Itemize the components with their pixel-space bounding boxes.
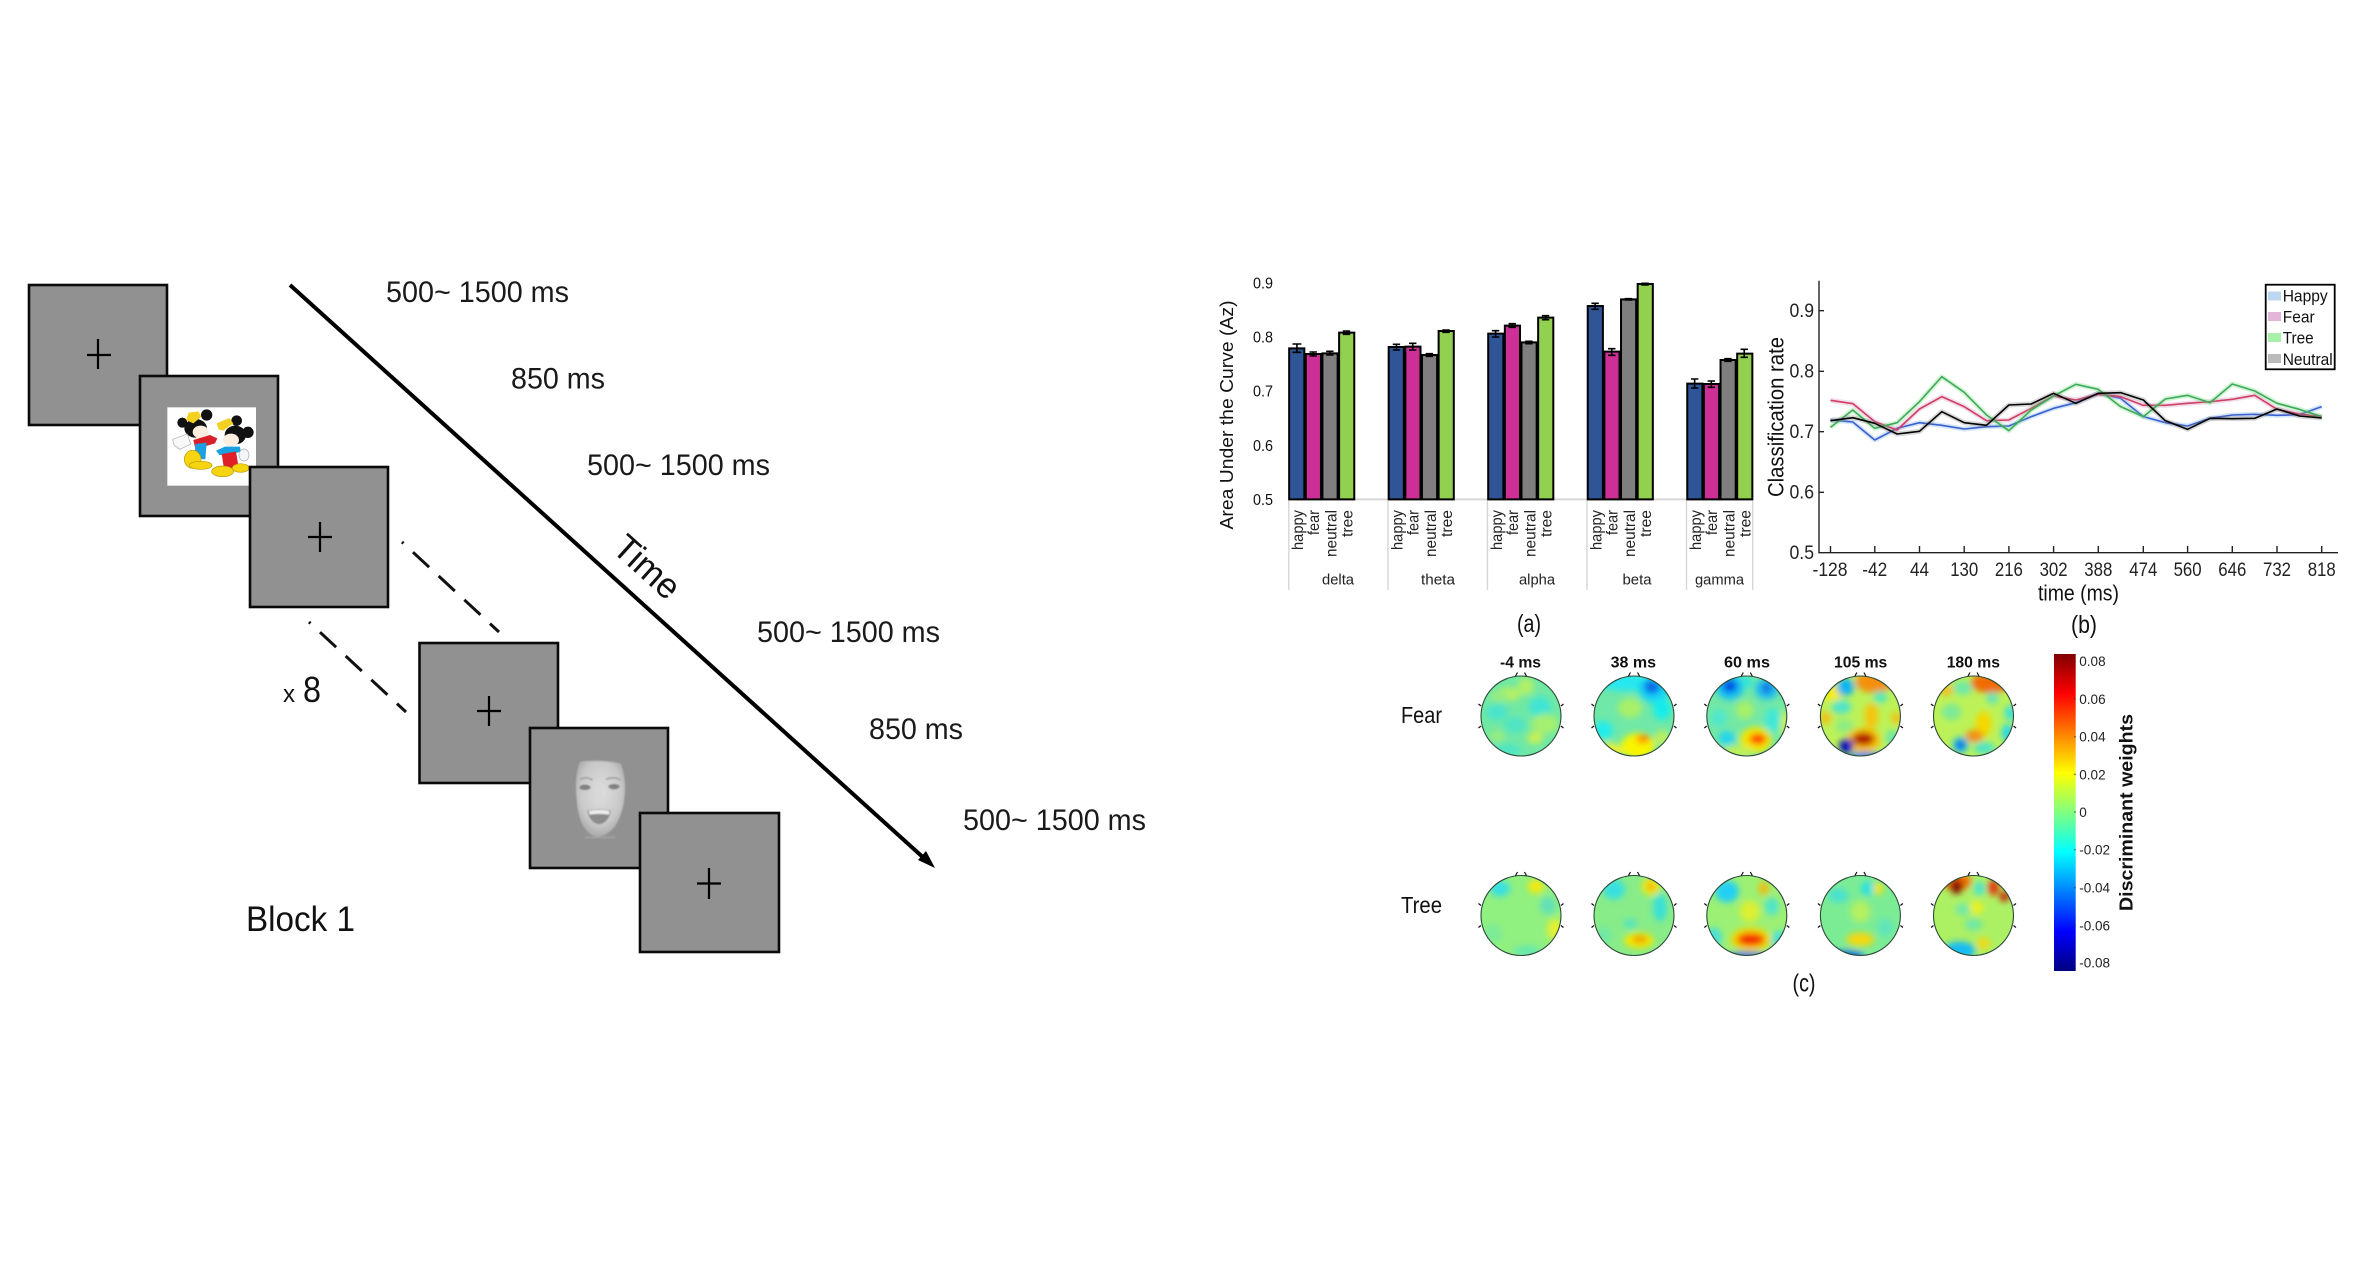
- category labels: tree: [1638, 510, 1655, 537]
- category labels: neutral: [1722, 510, 1739, 557]
- stimulus screen 3: fixation: [250, 467, 388, 607]
- x tick labels: 646: [2218, 560, 2246, 581]
- colorbar tick labels: -0.06: [2079, 918, 2110, 933]
- caption (b): (b): [2071, 611, 2097, 639]
- legend: Fear: [2283, 308, 2315, 327]
- x tick labels: 732: [2263, 560, 2291, 581]
- category labels: happy: [1290, 510, 1307, 550]
- frequency band labels: delta: [1322, 572, 1355, 588]
- x tick labels: -128: [1812, 560, 1848, 581]
- category labels: [1290, 510, 1755, 557]
- panel (c): scalp topographic maps: [1401, 654, 2137, 998]
- category labels: happy: [1489, 510, 1506, 550]
- duration labels: 850 ms: [869, 713, 963, 746]
- topomap: Fear 38 ms: [1592, 672, 1676, 759]
- duration labels: 500~ 1500 ms: [386, 276, 569, 309]
- colorbar tick labels: -0.04: [2079, 881, 2111, 896]
- y tick labels: 0.6: [1790, 482, 1814, 504]
- category labels: tree: [1340, 510, 1357, 537]
- dashed line: lower continuation: [309, 622, 406, 712]
- duration labels: [386, 276, 1146, 837]
- colorbar tick labels: 0.04: [2079, 730, 2106, 745]
- bars: gamma band: [1687, 349, 1752, 499]
- y axis title: Area Under the Curve (Az): [1217, 301, 1237, 529]
- stimulus screen 6: fixation: [640, 813, 779, 952]
- duration labels: 500~ 1500 ms: [757, 616, 940, 649]
- legend: [2266, 285, 2335, 369]
- stimulus screen 2: cartoon image: [140, 376, 278, 516]
- caption (c): (c): [1792, 970, 1816, 998]
- bars: delta band: [1289, 331, 1354, 499]
- dashed line: upper continuation: [402, 542, 499, 632]
- category labels: happy: [1589, 510, 1606, 550]
- x tick labels: [1812, 560, 2336, 581]
- line: Happy: [1830, 393, 2322, 440]
- x tick labels: -42: [1862, 560, 1887, 581]
- topomap: Tree 60 ms: [1704, 872, 1789, 964]
- bars: theta band: [1389, 330, 1454, 499]
- category labels: neutral: [1622, 510, 1639, 557]
- topomap: Tree 105 ms: [1818, 872, 1903, 962]
- time labels: 60 ms: [1724, 655, 1770, 672]
- topomap: Fear -4 ms: [1478, 672, 1564, 758]
- colorbar tick labels: 0.02: [2079, 767, 2106, 782]
- x tick labels: 130: [1950, 560, 1978, 581]
- category labels: tree: [1738, 510, 1755, 537]
- frequency band labels: [1322, 572, 1745, 588]
- topomap: Tree 38 ms: [1592, 872, 1676, 958]
- time labels: 180 ms: [1947, 655, 2000, 672]
- y axis title: Classification rate: [1764, 337, 1788, 497]
- legend: Neutral: [2283, 350, 2333, 369]
- category labels: neutral: [1423, 510, 1440, 557]
- colorbar tick labels: [2079, 654, 2111, 971]
- x tick labels: 818: [2308, 560, 2336, 581]
- time labels: 105 ms: [1834, 655, 1887, 672]
- category labels: fear: [1406, 510, 1423, 535]
- bars: alpha band: [1488, 316, 1553, 499]
- x tick labels: 388: [2084, 560, 2112, 581]
- category labels: neutral: [1324, 510, 1341, 557]
- x tick labels: 44: [1910, 560, 1929, 581]
- time labels: 38 ms: [1611, 655, 1656, 672]
- legend: Happy: [2283, 287, 2328, 306]
- stimulus screen 4: fixation: [420, 643, 558, 783]
- topomap: Tree -4 ms: [1478, 872, 1564, 958]
- stimulus screen 1: fixation: [29, 285, 167, 425]
- category labels: tree: [1439, 510, 1456, 537]
- time labels: -4 ms: [1500, 655, 1541, 672]
- category labels: fear: [1505, 510, 1522, 535]
- x tick labels: 474: [2129, 560, 2158, 581]
- category labels: fear: [1306, 510, 1323, 535]
- category labels: neutral: [1523, 510, 1540, 557]
- category labels: fear: [1704, 510, 1721, 535]
- frequency band labels: gamma: [1695, 572, 1745, 588]
- y axis tick labels: 0.5: [1253, 492, 1273, 509]
- y tick labels: [1790, 301, 1814, 564]
- duration labels: 850 ms: [511, 362, 605, 396]
- row label: Fear: Fear: [1401, 702, 1442, 728]
- duration labels: 500~ 1500 ms: [963, 804, 1146, 837]
- topomap: Fear 105 ms: [1818, 671, 1903, 762]
- y axis tick labels: 0.6: [1253, 438, 1273, 455]
- caption (a): (a): [1517, 610, 1541, 638]
- y axis tick labels: 0.7: [1253, 384, 1273, 400]
- bars: beta band: [1588, 283, 1653, 499]
- x tick labels: 216: [1995, 560, 2023, 581]
- x tick labels: 302: [2040, 560, 2068, 581]
- y axis tick labels: 0.8: [1253, 330, 1273, 346]
- bars: [1289, 283, 1753, 590]
- axes and ticks: [1819, 281, 2338, 553]
- y tick labels: 0.9: [1790, 301, 1814, 322]
- colorbar: [2054, 654, 2137, 971]
- frequency band labels: beta: [1622, 572, 1652, 588]
- y axis tick labels: 0.9: [1253, 276, 1273, 292]
- category labels: tree: [1539, 510, 1556, 537]
- panel: experiment paradigm timeline: [29, 276, 1146, 952]
- arrow: time axis: [290, 285, 935, 868]
- frequency band labels: theta: [1421, 572, 1456, 588]
- repeat count: 8: [303, 669, 321, 710]
- topomap: Fear 180 ms: [1931, 672, 2016, 758]
- colorbar tick labels: -0.02: [2079, 843, 2110, 858]
- label: Block 1: Block 1: [246, 900, 355, 939]
- legend: Tree: [2283, 328, 2314, 347]
- chart (a): area under the curve bar chart: [1217, 276, 1755, 638]
- category labels: happy: [1688, 510, 1705, 550]
- stimulus screen 5: face image: [530, 728, 668, 868]
- colorbar title: Discriminant weights: [2117, 714, 2137, 911]
- line: Tree: [1830, 377, 2322, 431]
- y axis tick labels: [1253, 276, 1273, 509]
- y tick labels: 0.7: [1790, 422, 1814, 443]
- picture: smiling face: [576, 761, 625, 838]
- row label: Tree: Tree: [1401, 892, 1442, 918]
- y tick labels: 0.5: [1790, 543, 1814, 564]
- label: Time: Time: [605, 526, 689, 607]
- topomap: Tree 180 ms: [1931, 872, 2016, 960]
- time labels: [1500, 655, 2000, 672]
- chart (b): classification rate line chart: [1764, 281, 2338, 639]
- data lines: [1830, 377, 2322, 440]
- y tick labels: 0.8: [1790, 362, 1814, 382]
- category labels: fear: [1605, 510, 1622, 535]
- frequency band labels: alpha: [1519, 572, 1556, 588]
- line: Fear: [1830, 394, 2322, 430]
- category labels: happy: [1390, 510, 1407, 550]
- line: Neutral: [1830, 393, 2322, 434]
- repeat count: [283, 669, 321, 710]
- x tick labels: 560: [2174, 560, 2202, 581]
- colorbar tick labels: 0.06: [2079, 692, 2106, 707]
- colorbar tick labels: -0.08: [2079, 956, 2110, 971]
- duration labels: 500~ 1500 ms: [587, 449, 770, 482]
- colorbar tick labels: 0.08: [2079, 654, 2106, 669]
- repeat count: x: [283, 681, 295, 708]
- x axis title: time (ms): [2038, 581, 2119, 606]
- picture: two cartoon mice: [167, 407, 256, 486]
- colorbar tick labels: 0: [2079, 805, 2087, 820]
- topomap: Fear 60 ms: [1704, 672, 1789, 758]
